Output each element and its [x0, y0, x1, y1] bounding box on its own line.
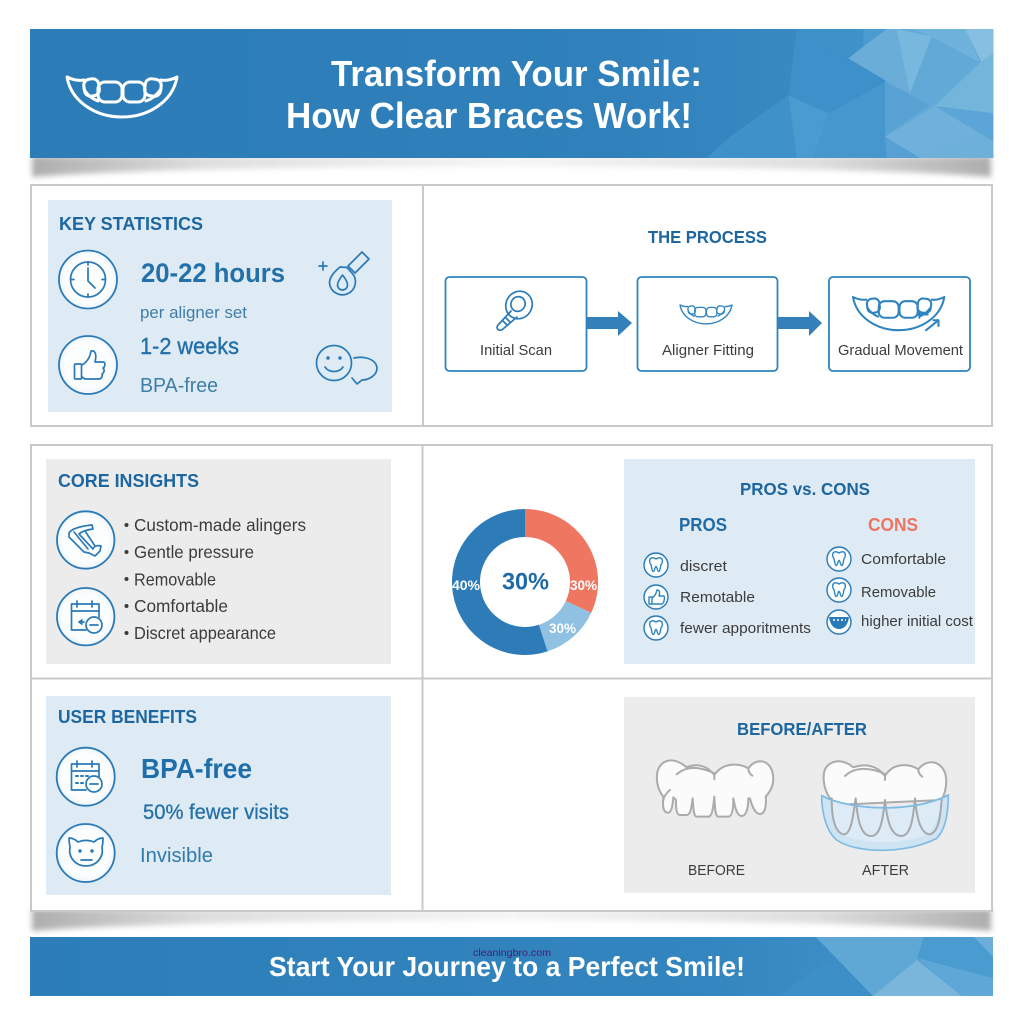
- heading: key statistics: KEY STATISTICS: [59, 213, 203, 234]
- label: before: BEFORE: [688, 862, 745, 879]
- panel: the process: [446, 227, 970, 371]
- benefit: BPA-free: BPA-free: [141, 753, 252, 784]
- cons column: Removable: [861, 584, 936, 601]
- cons column: [827, 515, 974, 634]
- heading: user benefits: USER BENEFITS: [58, 706, 197, 727]
- heading: pros vs cons: PROS vs. CONS: [740, 479, 870, 499]
- panel: before and after: [624, 697, 975, 893]
- cons column: CONS: [868, 515, 918, 535]
- donut chart: [452, 509, 598, 655]
- bullet list: Discret appearance: [134, 623, 276, 643]
- pros column: discret: [680, 558, 728, 575]
- title: How Clear Braces Work!: [286, 95, 692, 136]
- donut chart: 30%: [570, 578, 597, 593]
- pros column: fewer apporitments: [680, 620, 811, 637]
- panel: key statistics: [48, 200, 392, 412]
- icon: happy face: [57, 824, 115, 882]
- lower frame shadow: [32, 909, 991, 931]
- title: [286, 53, 702, 136]
- heading: core insights: CORE INSIGHTS: [58, 470, 199, 491]
- bullet list: Custom-made alingers: [134, 515, 306, 535]
- icon: calendar with minus: [57, 588, 114, 645]
- watermark: cleaningbro.com: [473, 947, 551, 959]
- step: aligner fitting: Aligner Fitting: [662, 342, 754, 359]
- icon: calendar: [57, 748, 115, 806]
- icon: clock: [59, 250, 117, 308]
- stat: hours: 20-22 hours: [141, 258, 285, 288]
- stat label: BPA-free: BPA-free: [140, 374, 218, 397]
- icon: smiley with speech bubble: [316, 346, 377, 384]
- icon: cleaning drop: [319, 252, 369, 295]
- step: initial scan: [446, 277, 586, 371]
- bullet list: Comfortable: [134, 596, 228, 616]
- heading: before/after: BEFORE/AFTER: [737, 719, 867, 739]
- bullet list: Removable: [134, 570, 216, 590]
- arrow: [777, 311, 822, 336]
- panel: pros vs cons: [624, 459, 975, 664]
- benefit: invisible: Invisible: [140, 845, 213, 867]
- step: gradual movement: Gradual Movement: [838, 342, 964, 359]
- donut chart: 30%: [502, 568, 549, 596]
- header banner: [30, 29, 993, 158]
- footer banner: [30, 937, 993, 996]
- footer call to action: Start Your Journey to a Perfect Smile!: [269, 951, 745, 982]
- lower frame: [31, 445, 992, 911]
- pros column: PROS: [679, 515, 727, 535]
- arrow: [586, 311, 632, 336]
- icon: thumbs up: [59, 336, 117, 394]
- icon: smile logo: [67, 77, 177, 117]
- step: gradual movement: [829, 277, 970, 371]
- stat: weeks: 1-2 weeks: [140, 333, 239, 359]
- pros column: [644, 515, 811, 640]
- label: after: AFTER: [862, 862, 909, 879]
- cons column: Comfortable: [861, 551, 946, 568]
- pros column: Remotable: [680, 589, 755, 606]
- illustration: teeth before: [657, 760, 773, 817]
- donut chart: 40%: [452, 578, 480, 593]
- header shadow: [32, 156, 991, 177]
- bullet list: [124, 515, 306, 643]
- donut chart: 30%: [549, 621, 576, 636]
- cons column: higher initial cost: [861, 613, 974, 630]
- step: initial scan: Initial Scan: [480, 342, 552, 359]
- title: Transform Your Smile:: [331, 53, 702, 94]
- bullet list: Gentle pressure: [134, 542, 254, 562]
- top frame: [31, 185, 992, 426]
- stat label: per aligner set: per aligner set: [140, 303, 247, 322]
- illustration: teeth after with aligner: [822, 761, 948, 850]
- panel: core insights: [46, 459, 391, 664]
- icon: aligner tray: [57, 511, 114, 569]
- benefit: fewer visits: 50% fewer visits: [143, 801, 289, 824]
- heading: the process: THE PROCESS: [648, 227, 767, 247]
- step: aligner fitting: [638, 277, 778, 371]
- panel: user benefits: [46, 696, 391, 895]
